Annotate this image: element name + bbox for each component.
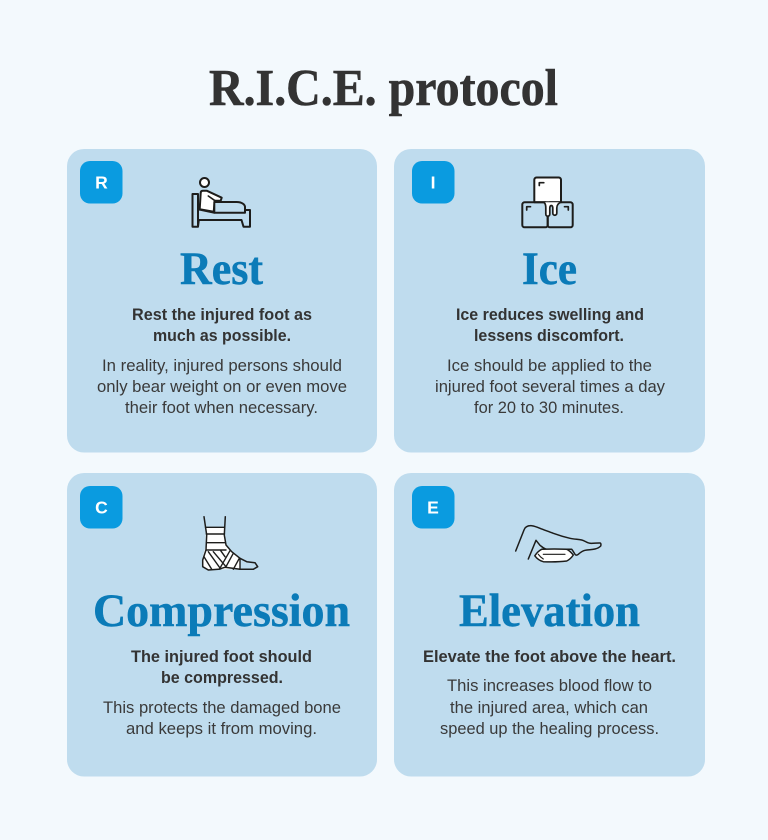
title: R.I.C.E. protocol	[209, 60, 558, 117]
bold summary: be compressed.	[161, 669, 283, 687]
body text: their foot when necessary.	[125, 398, 318, 417]
bold summary	[131, 648, 312, 687]
badge: C: C	[95, 498, 108, 518]
bold summary: much as possible.	[153, 327, 291, 345]
body text: only bear weight on or even move	[97, 377, 347, 396]
body text: for 20 to 30 minutes.	[474, 398, 624, 417]
badge: C	[80, 486, 122, 528]
icon: leg elevated on a pillow	[516, 526, 601, 562]
panel: elevation	[394, 473, 705, 776]
heading: Compression: Compression	[93, 585, 350, 637]
body text: the injured area, which can	[450, 698, 648, 717]
body text	[440, 676, 659, 738]
badge: I	[412, 161, 454, 204]
body text: This increases blood flow to	[447, 676, 652, 695]
body text: Ice should be applied to the	[447, 356, 652, 375]
icon: melting ice cubes	[522, 178, 573, 227]
badge: I: I	[431, 172, 435, 192]
badge: E: E	[427, 498, 439, 518]
body text	[97, 356, 347, 417]
heading: Elevation: Elevation	[459, 585, 640, 637]
heading: Ice: Ice	[522, 243, 577, 295]
body text	[103, 698, 341, 738]
body text: injured foot several times a day	[435, 377, 665, 396]
bold summary: Ice reduces swelling and	[456, 306, 644, 324]
heading: Rest: Rest	[180, 243, 263, 295]
panel: compression	[67, 473, 377, 776]
bold summary: lessens discomfort.	[474, 327, 624, 345]
body text	[435, 356, 665, 417]
body text: speed up the healing process.	[440, 719, 659, 738]
bold summary	[132, 306, 312, 345]
body text: This protects the damaged bone	[103, 698, 341, 717]
bold summary: The injured foot should	[131, 648, 312, 666]
bold summary	[456, 306, 644, 345]
icon: person sitting in bed	[192, 178, 250, 227]
body text: and keeps it from moving.	[126, 719, 317, 738]
badge: R	[80, 161, 122, 204]
icon: bandaged foot	[203, 517, 258, 570]
panel: rest	[67, 149, 377, 452]
badge: E	[412, 486, 454, 528]
panel: ice	[394, 149, 705, 452]
body text: In reality, injured persons should	[102, 356, 342, 375]
bold summary: Rest the injured foot as	[132, 306, 312, 324]
bold summary: Elevate the foot above the heart.	[423, 648, 676, 666]
badge: R: R	[95, 172, 108, 192]
